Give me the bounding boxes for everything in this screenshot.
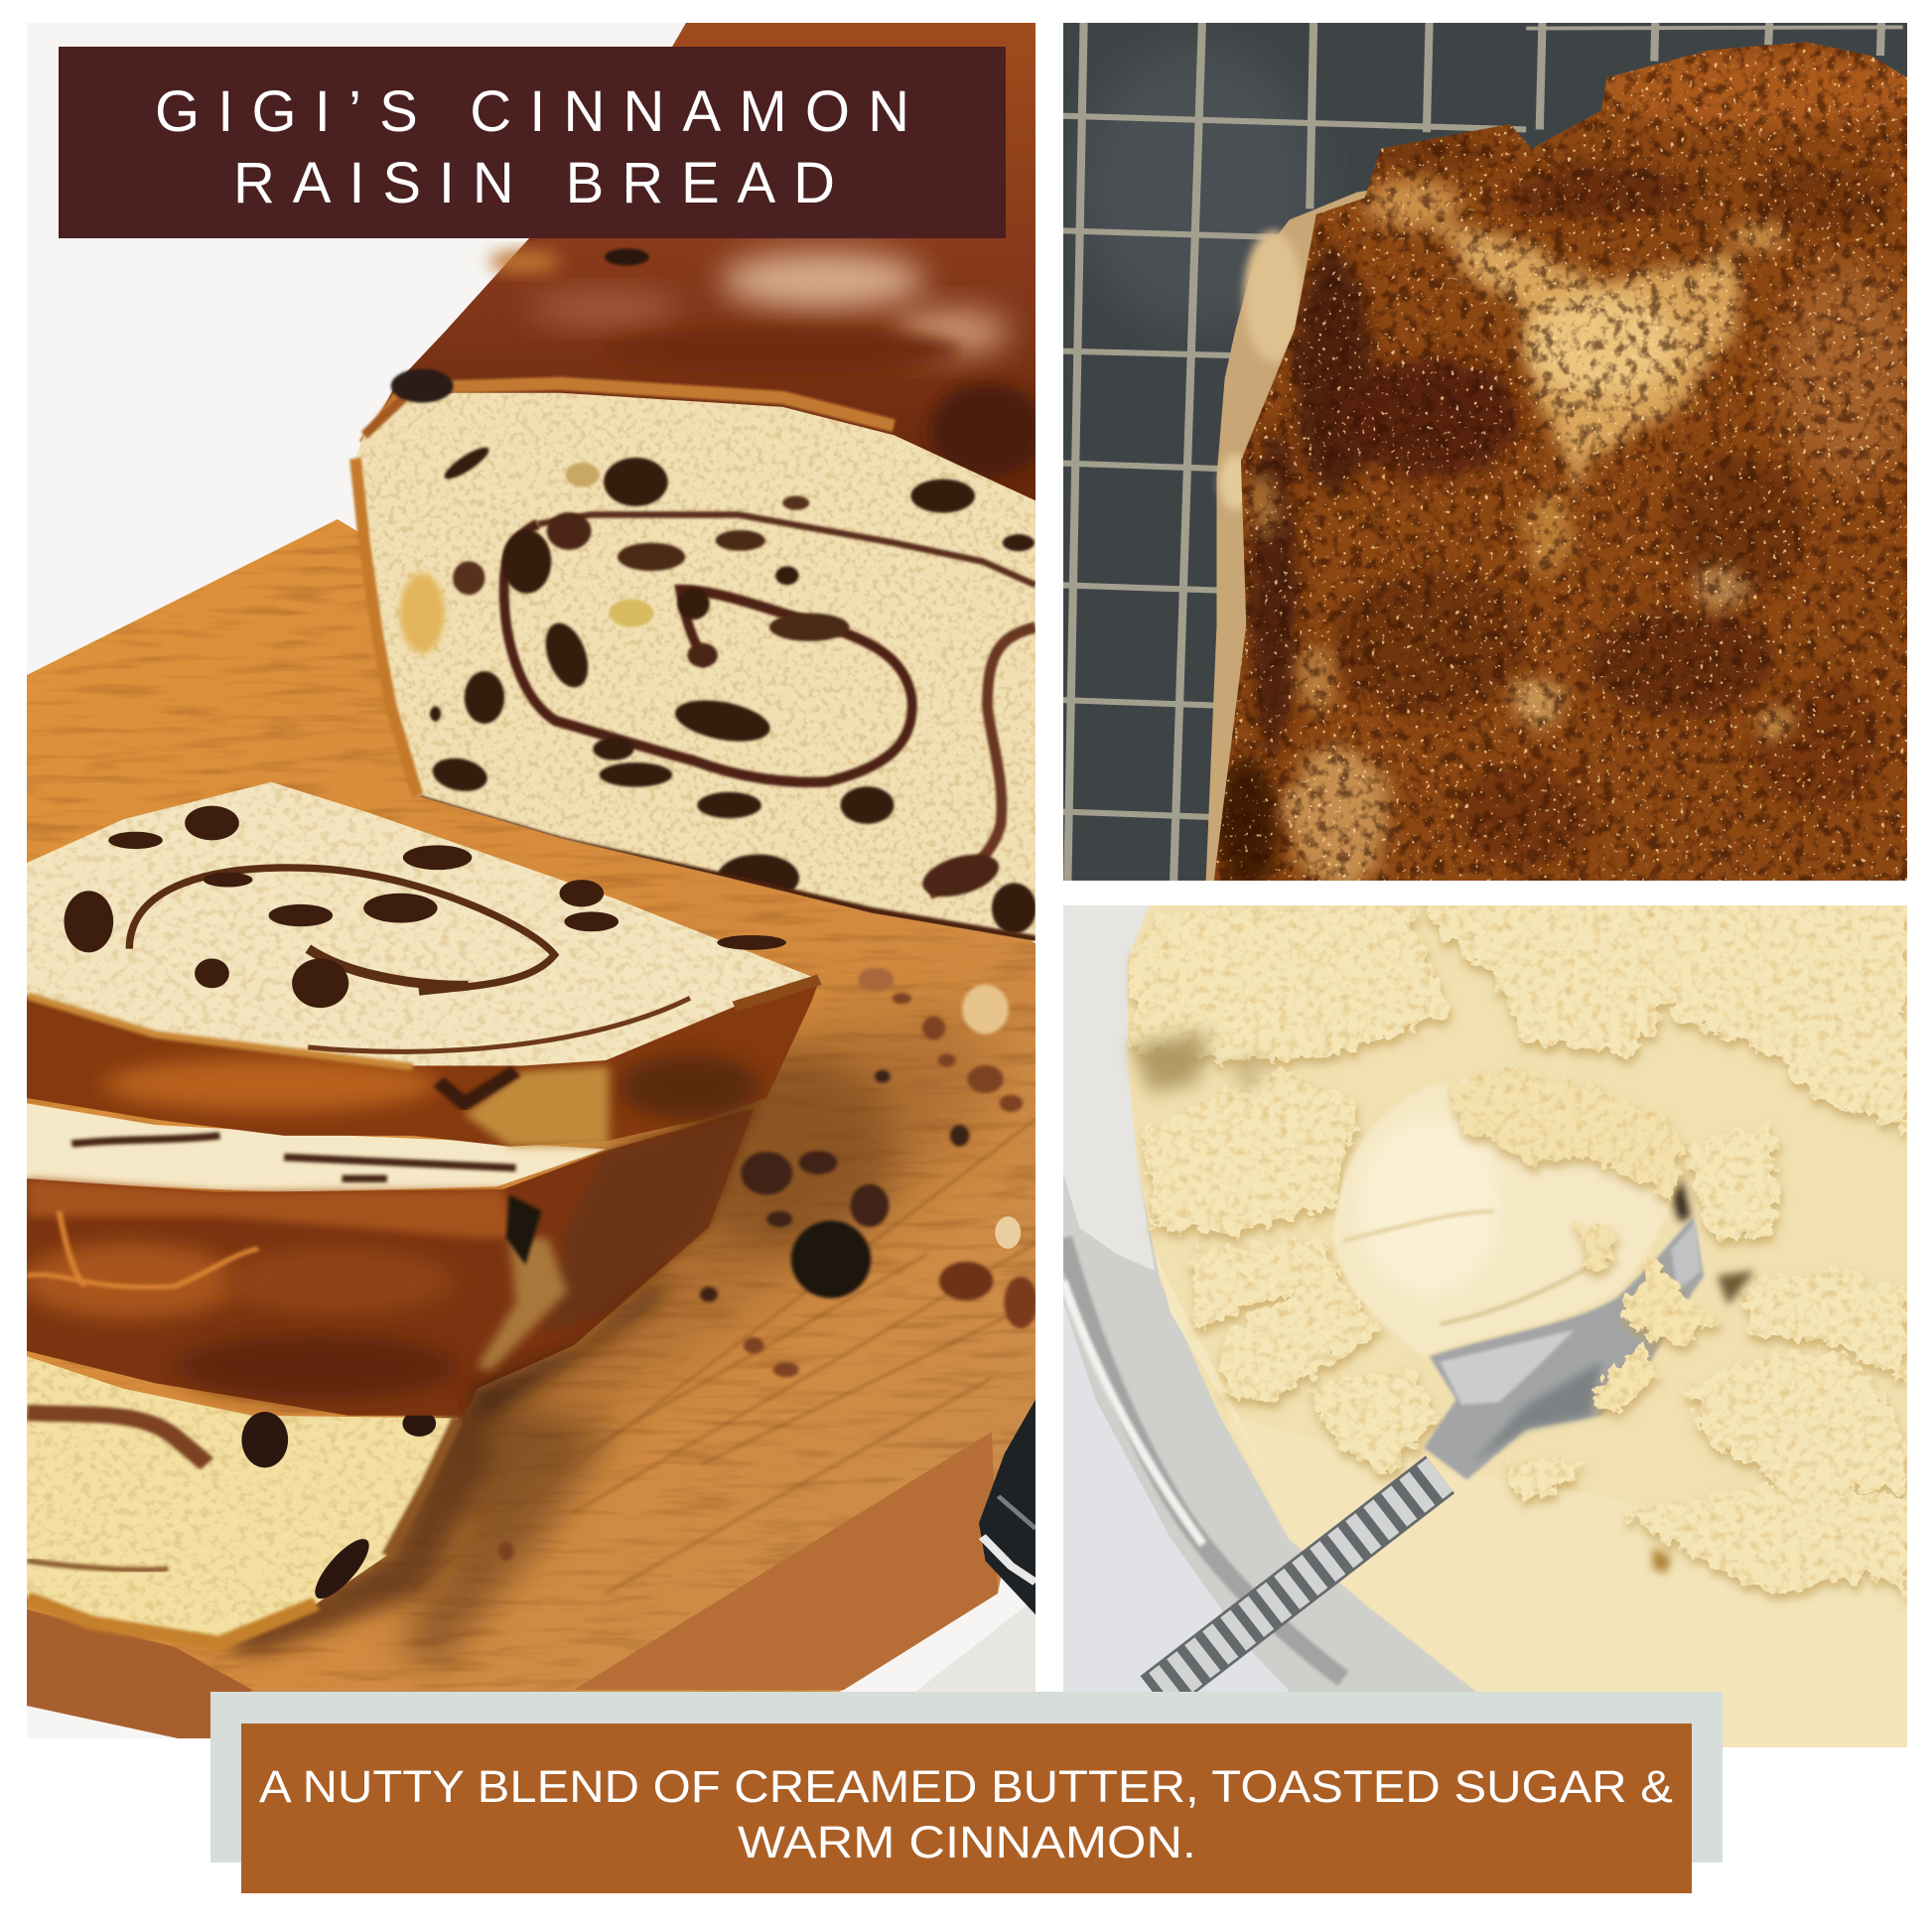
raisin, crumbs and wood grain on board: [413, 968, 1037, 1593]
silver pan rim: [1063, 905, 1548, 1747]
title line two: RAISIN BREAD: [233, 151, 835, 215]
ice cream scoop ball: [1332, 1066, 1682, 1356]
sliced loaf stack: [21, 782, 1037, 1658]
wooden cutting board: [27, 519, 1035, 1747]
photo: cinnamon raisin loaf on cutting board: [21, 23, 1045, 1747]
toast slice: [1205, 42, 1907, 881]
ice cream mass: [1128, 895, 1907, 1747]
photo: scoop of ice cream in a pan: [1063, 895, 1907, 1747]
bread slice one: [27, 782, 819, 1147]
loaf cut face and swirl: [338, 248, 1045, 973]
loaf crust: [355, 23, 1035, 516]
caption backing panel: [210, 1692, 1723, 1863]
metal scoop and ribbed handle: [1155, 1217, 1720, 1695]
caption text line two: WARM CINNAMON.: [738, 1817, 1196, 1867]
knife handle: [979, 1399, 1035, 1614]
title line one: GIGI’S CINNAMON: [155, 79, 909, 144]
cooling rack grid: [1063, 23, 1903, 881]
photo: caramelised toast on cooling rack: [1063, 23, 1932, 893]
caption panel: [241, 1724, 1692, 1893]
caption text line one: A NUTTY BLEND OF CREAMED BUTTER, TOASTED SUGAR &: [259, 1761, 1673, 1812]
title panel: [59, 47, 1006, 238]
bread slice three: [27, 1356, 490, 1658]
bread slice two: [21, 1103, 754, 1427]
